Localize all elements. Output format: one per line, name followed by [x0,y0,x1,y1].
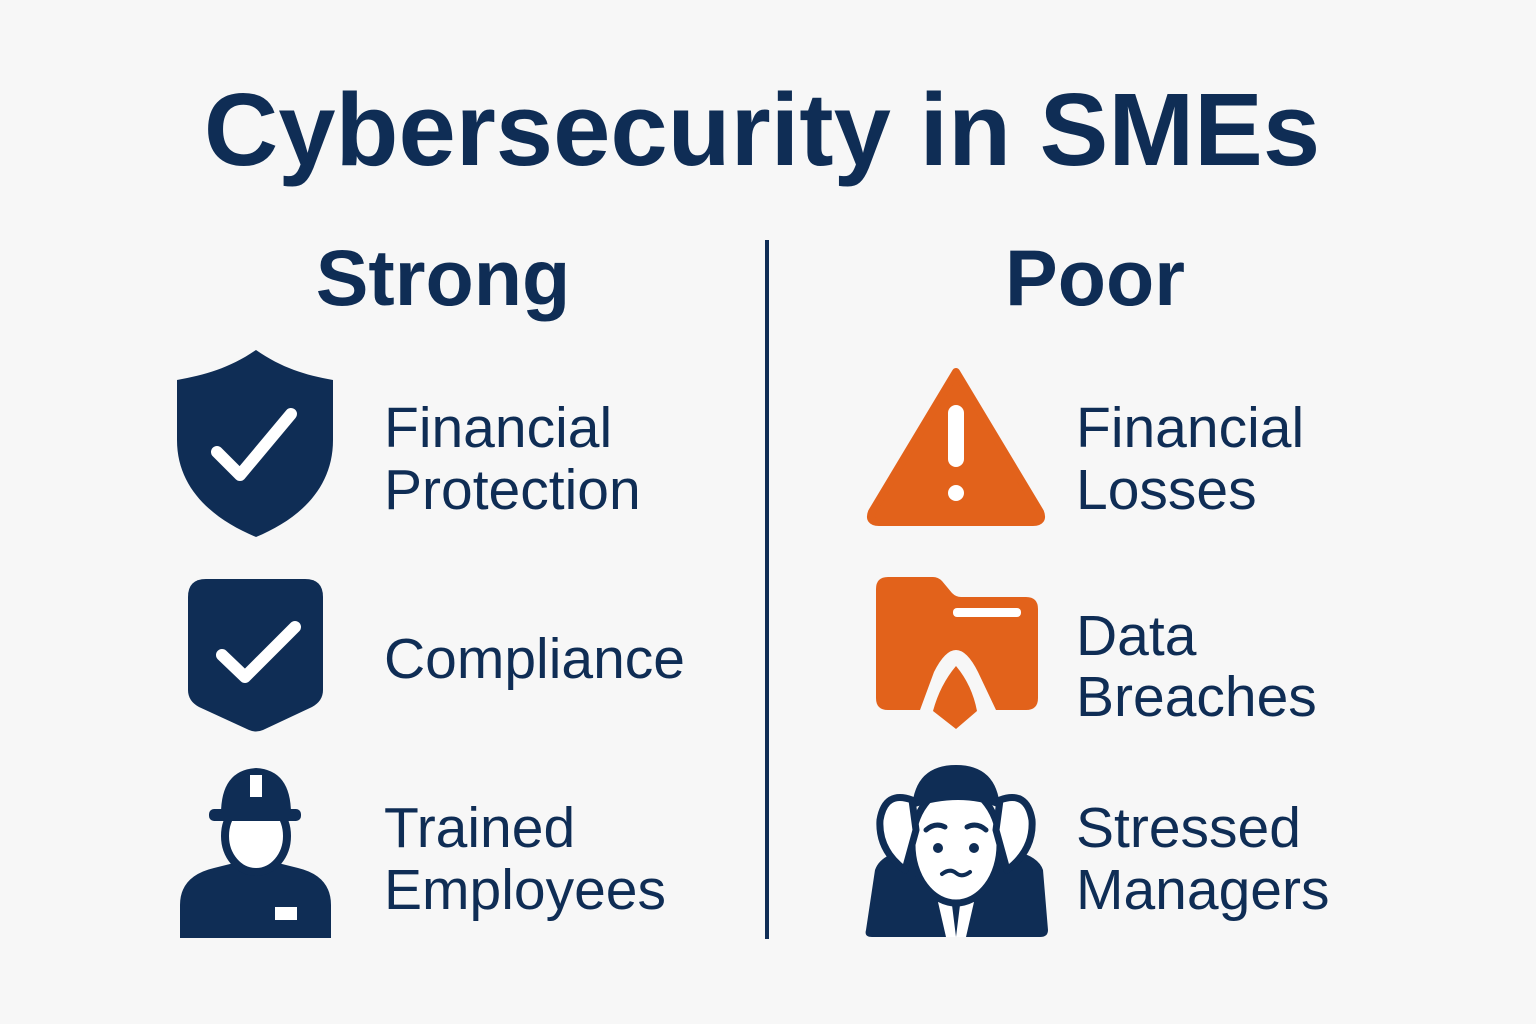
text: Stressed Managers: Stressed [1076,796,1301,860]
text: Stressed Managers: Managers [1076,858,1329,922]
text: Trained Employees: Trained [384,796,575,860]
heading: Poor: Poor [1005,233,1185,322]
icon: stressed manager [866,765,1048,937]
title: Cybersecurity in SMEs [204,72,1320,187]
text: Trained Employees: Employees [384,858,666,922]
text: Financial Losses: Losses [1076,458,1257,522]
panel: poor [866,372,1329,937]
panel: strong [177,350,685,938]
icon: folder breach [876,577,1038,729]
icon: shield check [177,350,333,537]
icon: warning triangle [871,372,1041,522]
text: Financial Protection: Protection [384,458,641,522]
divider [765,240,769,939]
text: Compliance: Compliance [384,627,685,691]
heading: Strong: Strong [316,233,570,322]
text: Financial Protection: Financial [384,396,612,460]
icon: compliance badge [188,579,323,732]
text: Data Breaches: Data [1076,604,1196,668]
text: Data Breaches: Breaches [1076,665,1317,729]
icon: trained worker [180,768,331,938]
text: Financial Losses: Financial [1076,396,1304,460]
